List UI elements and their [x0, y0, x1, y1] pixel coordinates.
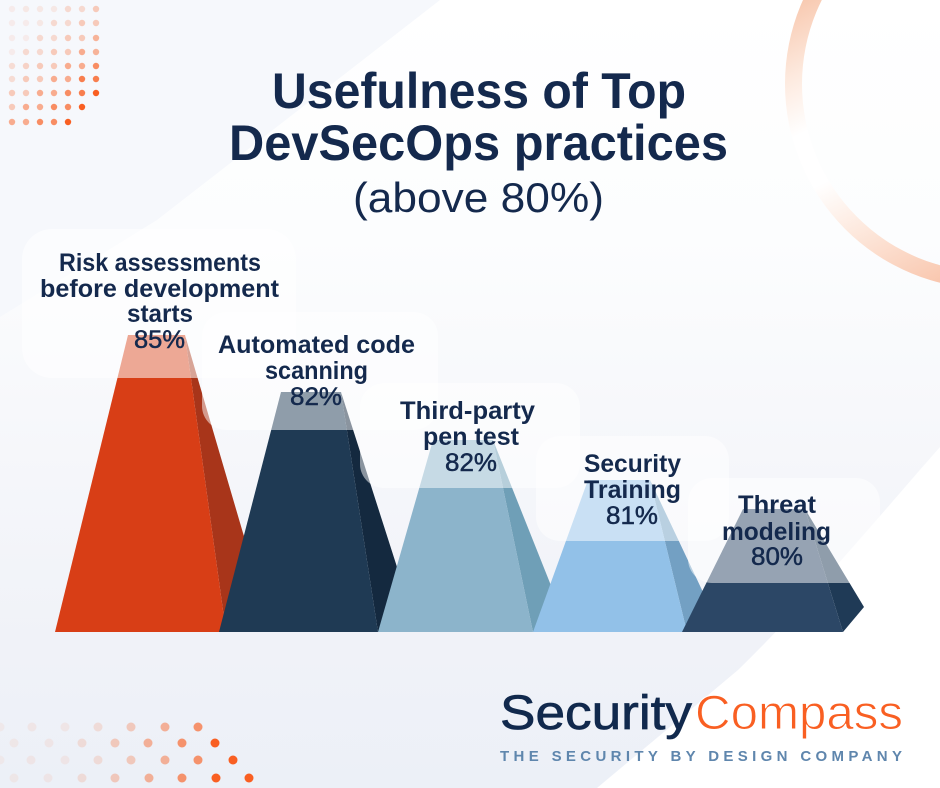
label text: 80%: [751, 543, 803, 571]
label text: [40, 249, 280, 354]
logo: Security Compass: Security: [500, 687, 692, 740]
label text: [584, 450, 681, 530]
label text: before development: [40, 275, 280, 303]
label text: modeling: [722, 518, 831, 546]
label text: 85%: [134, 326, 185, 354]
pyramid: red: [55, 335, 268, 632]
pyramid item: security training 81%: [533, 436, 729, 632]
title: DevSecOps practices: [229, 115, 728, 171]
logo: Security Compass: THE SECURITY BY DESIGN COMPANY: [500, 748, 902, 765]
label text: Risk assessments: [59, 249, 261, 277]
pyramid item: third-party pen test 82%: [360, 383, 580, 632]
pyramid item: risk assessments 85%: [22, 229, 296, 632]
pyramid item: automated code scanning 82%: [202, 312, 438, 632]
label text: 82%: [445, 449, 497, 477]
label card: [360, 383, 580, 488]
dot pattern bottom left: [0, 722, 254, 782]
logo: Security Compass: Compass: [695, 687, 903, 740]
label text: Automated code: [218, 331, 415, 359]
title: [229, 63, 728, 221]
label text: starts: [127, 300, 193, 328]
label card: [22, 229, 296, 378]
label text: Third-party: [400, 397, 535, 425]
label text: Security: [584, 450, 681, 478]
label text: 82%: [290, 383, 342, 411]
label text: Training: [584, 476, 681, 504]
pyramid: steel blue: [378, 440, 560, 632]
label text: [218, 331, 415, 411]
title: (above 80%): [353, 174, 604, 221]
decorative ring top right: [785, 0, 940, 289]
label card: [536, 436, 729, 541]
pyramid item: threat modeling 80%: [682, 478, 880, 632]
label text: scanning: [265, 357, 368, 385]
label text: [400, 397, 535, 477]
label card: [202, 312, 438, 430]
logo: Security Compass: [500, 687, 903, 765]
label card: [688, 478, 880, 583]
pyramid: dark blue: [682, 509, 864, 632]
label text: [722, 491, 831, 571]
label text: 81%: [606, 502, 658, 530]
label text: pen test: [423, 423, 520, 451]
pyramid: light blue: [533, 480, 715, 632]
pyramid: navy: [219, 392, 415, 632]
title: Usefulness of Top: [272, 63, 686, 119]
dot pattern top left: [9, 6, 99, 125]
label text: Threat: [738, 491, 817, 519]
